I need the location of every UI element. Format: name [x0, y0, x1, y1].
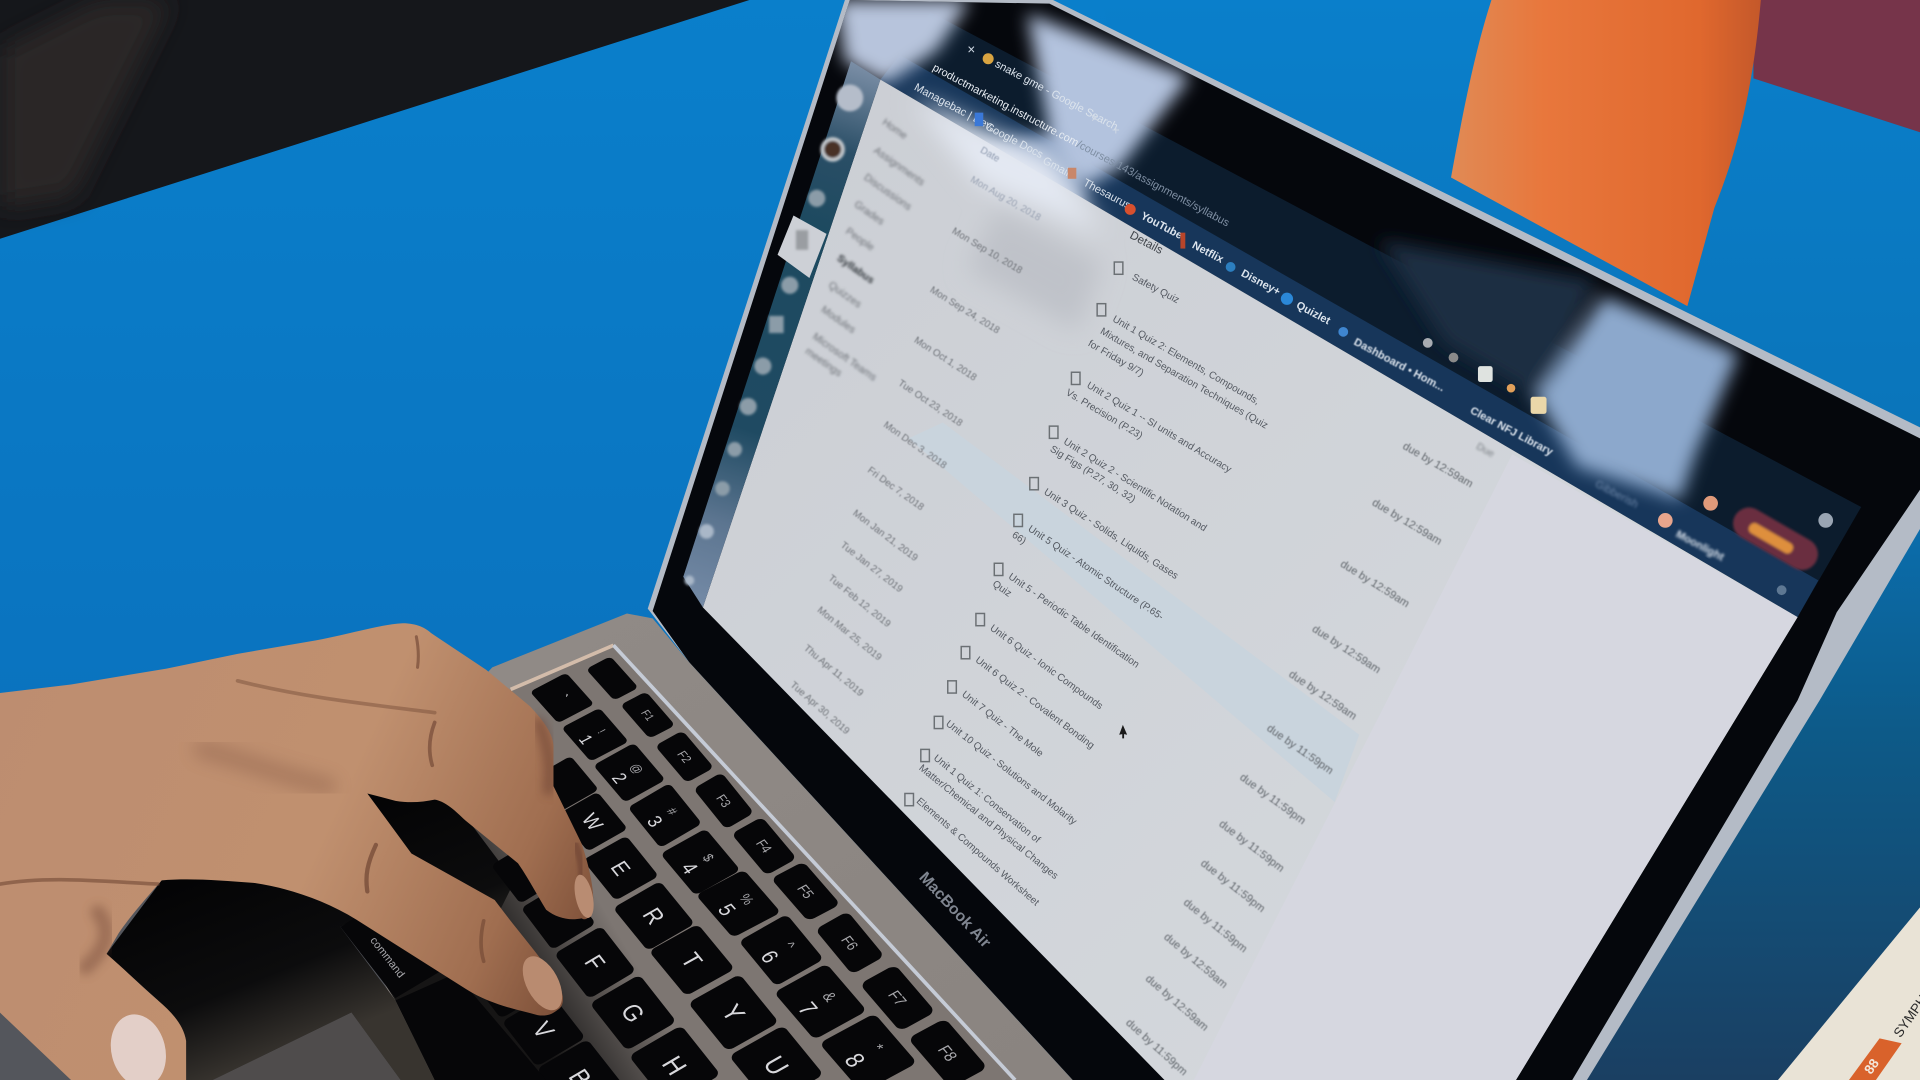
due date column [1123, 440, 1475, 1078]
syllabus assignment titles: Unit 3 Quiz - Solids, Liquids, Gases [1042, 487, 1180, 582]
trackpad [213, 1013, 400, 1080]
hand [0, 623, 597, 1080]
syllabus assignment titles: for Friday 9/7) [1086, 338, 1145, 379]
well edge highlights [511, 645, 1015, 1080]
middle finger nail [515, 950, 570, 1017]
due column heading: Due [1474, 441, 1496, 460]
syllabus dates: Mon Aug 20, 2018 [968, 174, 1043, 224]
book at bottom right: 88 [1861, 1056, 1882, 1077]
syllabus dates: Mon Dec 3, 2018 [881, 420, 949, 472]
syllabus dates: Fri Dec 7, 2018 [865, 465, 926, 513]
space bar [396, 973, 546, 1080]
palm and fingers [0, 623, 593, 1080]
mouse cursor [1119, 725, 1127, 738]
syllabus assignment titles: Unit 1 Quiz 2: Elements, Compounds, [1110, 314, 1261, 407]
browser tabs and bookmarks text [912, 58, 1726, 564]
course navigation text: Assignments [871, 145, 926, 188]
browser tabs and bookmarks text: YouTube [1139, 210, 1184, 242]
syllabus assignment titles: Unit 2 Quiz 2 - Scientific Notation and [1061, 436, 1208, 534]
dark background top left [0, 0, 749, 239]
browser tabs and bookmarks text: Thesaurus [1081, 177, 1133, 212]
course navigation text: Grades [852, 199, 886, 228]
update button [1732, 506, 1820, 572]
screen bezel [653, 0, 1920, 1080]
browser tabs and bookmarks text: Moonlight [1674, 528, 1726, 564]
function key row [586, 656, 988, 1080]
syllabus assignment titles: Unit 2 Quiz 1 -- SI units and Accuracy [1085, 380, 1233, 475]
glass reflections [836, 0, 1739, 500]
table area to the right of the laptop [1102, 0, 1920, 1080]
syllabus dates: Tue Feb 12, 2019 [826, 573, 893, 630]
browser tabs and bookmarks text: productmarketing.instructure.com/courses/143/assignments/syllabus [930, 62, 1232, 230]
syllabus dates: Tue Oct 23, 2018 [896, 378, 965, 429]
due date column: due by 12:59am [1286, 668, 1359, 723]
browser tabs and bookmarks text: Google Docs [983, 121, 1045, 161]
tab controls [967, 42, 1120, 138]
macbook air label: MacBook Air [915, 869, 994, 951]
course navigation text: Home [880, 117, 909, 142]
syllabus assignment titles: Unit 10 Quiz - Solutions and Molarity [943, 719, 1079, 827]
due date column: due by 12:59am [1401, 440, 1475, 490]
dark deck beneath the palm [107, 771, 514, 1080]
qwerty key row [533, 756, 824, 1080]
syllabus assignment titles: Unit 6 Quiz - Ionic Compounds [988, 623, 1105, 712]
tab controls: + [1112, 123, 1120, 138]
maroon background top right [1753, 0, 1920, 132]
due date column: due by 12:59am [1310, 623, 1383, 676]
course navigation text: Microsoft Teams [810, 331, 878, 384]
due date column: due by 11:59pm [1217, 818, 1286, 875]
due date column: due by 11:59pm [1264, 722, 1335, 777]
syllabus details heading: Details [1128, 229, 1165, 257]
keyboard keys [468, 656, 988, 1080]
browser tabs and bookmarks text: Dashboard • Hom... [1352, 336, 1447, 394]
syllabus assignment titles: Unit 5 Quiz - Atomic Structure (P.65- [1026, 524, 1165, 623]
active sidebar cell [778, 216, 827, 278]
orange bottle [1451, 0, 1761, 306]
syllabus assignment titles: Unit 5 - Periodic Table Identification [1006, 571, 1141, 671]
browser tab and url bar [880, 12, 1861, 617]
due date column: due by 12:59am [1143, 973, 1210, 1034]
thumb nail [103, 1008, 173, 1080]
assignment icons [905, 262, 1123, 806]
sheet: syllabus page [703, 80, 1798, 1080]
lms sidebar [683, 61, 880, 607]
due date column: due by 12:59am [1338, 558, 1411, 610]
syllabus dates: Tue Apr 30, 2019 [788, 680, 851, 737]
index finger nail [571, 873, 597, 920]
due date column: due by 12:59am [1161, 931, 1230, 991]
browser tabs and bookmarks text: Gmail [1041, 155, 1072, 179]
syllabus assignment titles: Quiz [990, 579, 1013, 600]
course navigation text: People [843, 226, 876, 254]
browser tabs and bookmarks text: Netflix [1190, 239, 1226, 266]
syllabus dates: Tue Jan 27, 2019 [838, 540, 905, 595]
syllabus dates: Thu Apr 11, 2019 [801, 643, 865, 699]
syllabus dates: Mon Jan 21, 2019 [850, 508, 920, 564]
bookmark icons [975, 53, 1833, 595]
browser tabs and bookmarks text: Quizlet [1294, 299, 1332, 327]
syllabus assignment titles: Unit 1 Quiz 1: Conservation of [931, 753, 1042, 846]
home key row [498, 855, 718, 1080]
syllabus assignment titles: Mixtures, and Separation Techniques (Quiz [1098, 326, 1270, 431]
due date column: due by 11:59pm [1237, 771, 1308, 827]
course navigation text: Syllabus [835, 253, 876, 287]
glare on page [912, 98, 1102, 331]
syllabus assignment titles: Sig Figs (P.27, 30, 32) [1048, 444, 1137, 505]
course navigation text: meetings [803, 346, 844, 379]
syllabus assignment titles: Safety Quiz [1130, 272, 1181, 306]
command key [340, 895, 447, 998]
sidebar icons [684, 84, 863, 585]
syllabus assignment titles: Unit 6 Quiz 2 - Covalent Bonding [973, 655, 1096, 752]
number key row [530, 673, 917, 1080]
browser tabs and bookmarks text: Clear NFJ Library [1468, 405, 1555, 459]
syllabus assignment titles [914, 272, 1270, 909]
laptop keyboard deck [318, 613, 1073, 1080]
tab controls: × [967, 42, 975, 57]
course navigation text: Modules [819, 304, 857, 336]
screen contents [683, 0, 1861, 1080]
book at bottom right [1778, 907, 1920, 1080]
finger shadows and creases [0, 637, 582, 967]
laptop lid edge [648, 0, 1920, 1080]
blank right side of page [1516, 604, 1798, 1080]
due date column: due by 11:59pm [1181, 897, 1249, 955]
course navigation text: Quizzes [826, 280, 863, 311]
highlighted row [1222, 663, 1359, 802]
course navigation text: Discussions [862, 172, 913, 213]
lower deck around trackpad [0, 784, 435, 1080]
syllabus assignment titles: Matter/Chemical and Physical Changes [916, 763, 1060, 882]
tab controls: × [1091, 110, 1099, 125]
bottom letter row [487, 1000, 620, 1080]
syllabus assignment titles: Unit 7 Quiz - The Mole [959, 689, 1045, 760]
syllabus dates: Mon Sep 24, 2018 [928, 285, 1002, 337]
syllabus dates: Date [978, 145, 1001, 165]
browser tabs and bookmarks text: Disney+ [1239, 268, 1282, 298]
syllabus dates: Mon Mar 25, 2019 [815, 605, 883, 663]
syllabus assignment titles: Elements & Compounds Worksheet [914, 796, 1041, 909]
syllabus dates: Mon Oct 1, 2018 [912, 335, 979, 384]
browser tabs and bookmarks text: Gibberish [1593, 478, 1640, 511]
command key label: command [367, 935, 407, 980]
syllabus dates: Mon Sep 10, 2018 [950, 226, 1025, 277]
keyboard well [318, 645, 1015, 1080]
syllabus dates [788, 145, 1043, 737]
due date column: due by 11:59pm [1198, 857, 1267, 915]
browser tabs and bookmarks text: snake gme - Google Search [993, 58, 1120, 133]
bookmarks bar [880, 55, 1818, 617]
due date column: due by 11:59pm [1123, 1017, 1189, 1078]
due date column: due by 12:59am [1370, 497, 1444, 548]
syllabus assignment titles: 66) [1010, 530, 1028, 547]
browser tabs and bookmarks text: Managebac | Dev... [912, 81, 1001, 136]
syllabus assignment titles: Vs. Precision (P.23) [1064, 387, 1144, 442]
course navigation text [803, 117, 926, 384]
